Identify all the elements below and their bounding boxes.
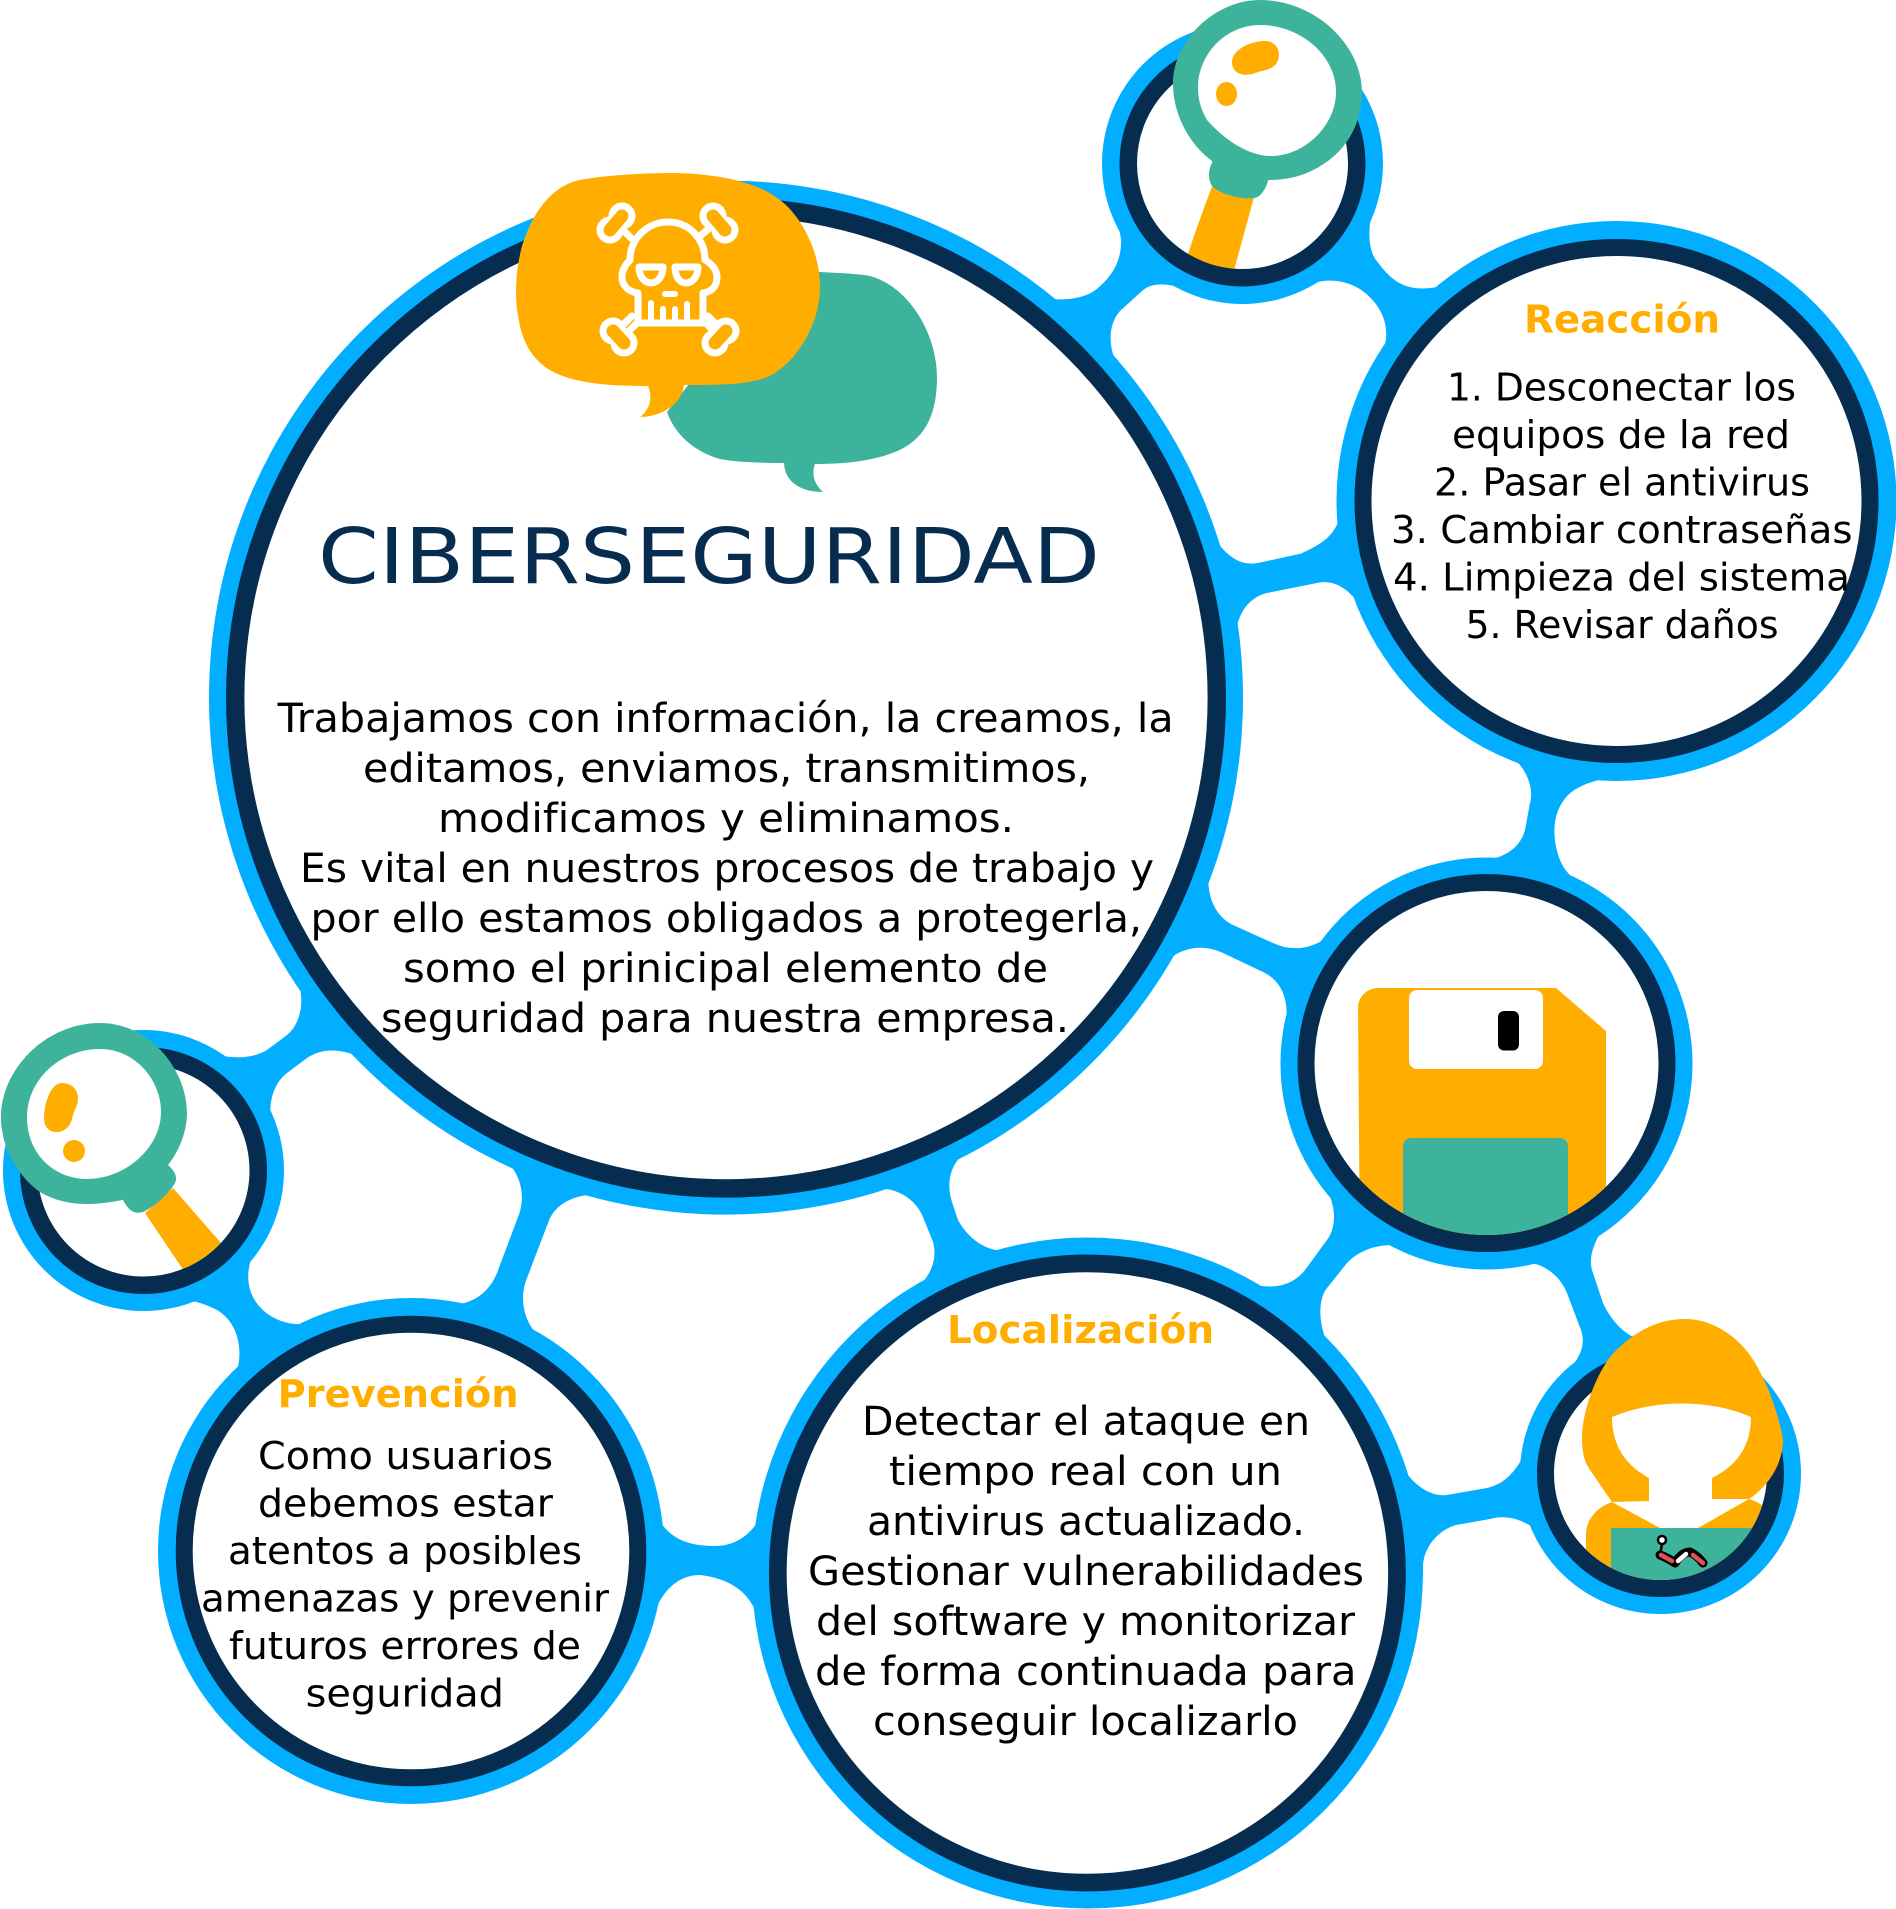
text block: localization: conseguir localizarlo [873, 1699, 1298, 1745]
connecting network: blue web between circles [182, 199, 1633, 1655]
exclamation spot large [1232, 41, 1279, 75]
text block: main description [277, 696, 1174, 1042]
text block: localization: antivirus actualizado. [867, 1499, 1305, 1545]
hood [1582, 1319, 1783, 1502]
text block: main description: seguridad para nuestra empresa. [381, 996, 1069, 1042]
text block: prevention: amenazas y prevenir [201, 1576, 609, 1620]
magnifier handle [1188, 186, 1254, 269]
text block: main description: Trabajamos con información, la creamos, la [277, 696, 1174, 742]
panel: left magnifier circle [3, 1030, 284, 1311]
magnifier handle left [145, 1188, 221, 1269]
exclamation spot small left [63, 1140, 85, 1162]
text block: prevention: futuros errores de [229, 1624, 581, 1668]
text block: main description: por ello estamos obligados a protegerla, [310, 896, 1142, 942]
text block: prevention: atentos a posibles [228, 1529, 582, 1573]
icon: skull and crossbones [596, 202, 740, 356]
panel: floppy circle [1280, 858, 1692, 1270]
heading: Reacción: Reacción [1524, 298, 1720, 342]
panel: main circle [209, 181, 1243, 1215]
icon: hooded user with worm [1582, 1319, 1783, 1608]
panel: worm circle [1520, 1333, 1801, 1614]
text block: reaction steps: 5. Revisar daños [1466, 603, 1778, 647]
icon: left magnifier [1, 1023, 187, 1213]
text block: prevention: Como usuarios [258, 1434, 553, 1478]
exclamation spot small [1216, 82, 1237, 106]
text block: reaction steps: 3. Cambiar contraseñas [1391, 508, 1852, 552]
text block: reaction steps: 2. Pasar el antivirus [1434, 460, 1810, 504]
text block: localization: Gestionar vulnerabilidades [808, 1549, 1364, 1595]
icon: top magnifier [1173, 0, 1362, 198]
text block: prevention: seguridad [306, 1672, 504, 1716]
text block: main description: Es vital en nuestros procesos de trabajo y [300, 846, 1154, 892]
text block: prevention: debemos estar [258, 1482, 553, 1526]
exclamation spot large left [44, 1083, 78, 1132]
panel: prevention circle [158, 1298, 664, 1804]
heading: Localización: Localización [947, 1308, 1214, 1352]
worm [1658, 1536, 1703, 1563]
text block: reaction steps: 1. Desconectar los [1447, 366, 1796, 410]
text block: localization: del software y monitorizar [816, 1599, 1356, 1645]
text block: reaction steps: equipos de la red [1452, 413, 1790, 457]
text block: localization: tiempo real con un [889, 1449, 1282, 1495]
text block: reaction steps [1391, 366, 1852, 647]
text block: localization: Detectar el ataque en [862, 1399, 1310, 1445]
icon: green speech bubble [667, 271, 937, 492]
heading: Prevención: Prevención [278, 1372, 519, 1416]
panel: localization circle [752, 1238, 1423, 1908]
title: CIBERSEGURIDAD [318, 513, 1100, 602]
text block: prevention [201, 1434, 609, 1716]
panel: reaction circle [1336, 221, 1896, 781]
panel: top magnifier circle [1102, 23, 1383, 304]
text block: main description: somo el prinicipal elemento de [403, 946, 1048, 992]
icon: orange speech bubble [516, 173, 820, 417]
icon: floppy disk [1358, 988, 1606, 1260]
text block: main description: editamos, enviamos, transmitimos, [363, 746, 1090, 792]
text block: main description: modificamos y eliminamos. [438, 796, 1014, 842]
text block: localization: de forma continuada para [815, 1649, 1356, 1695]
text block: localization [808, 1399, 1364, 1745]
text block: reaction steps: 4. Limpieza del sistema [1393, 556, 1850, 600]
